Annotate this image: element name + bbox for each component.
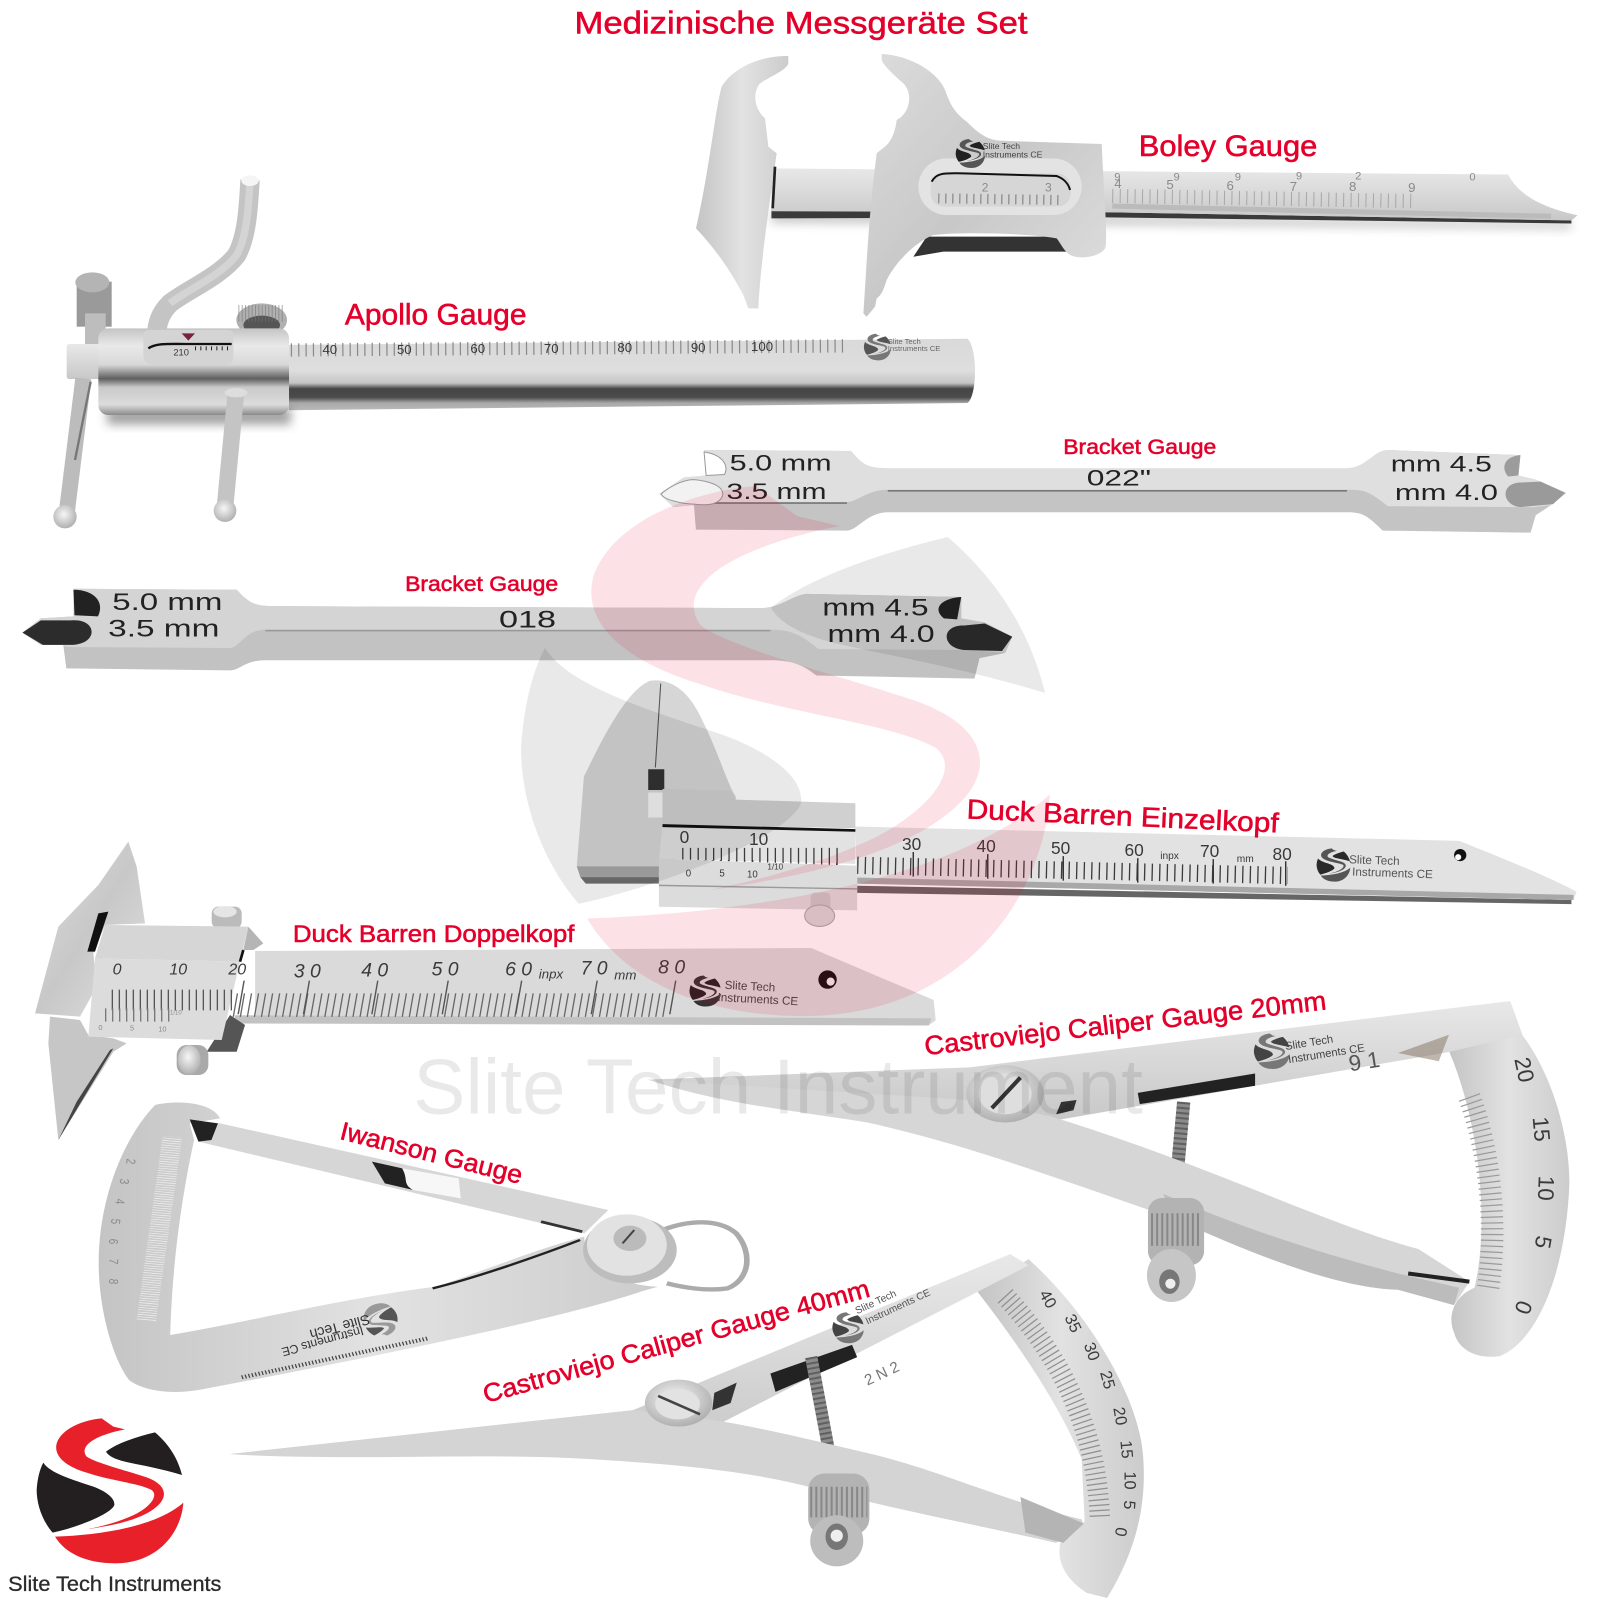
instrument: Apollo gauge: Instruments CE: [888, 344, 940, 353]
instrument: Castroviejo caliper 40mm: 35: [1061, 1311, 1085, 1335]
instrument: Castroviejo caliper 40mm: 0: [1111, 1526, 1130, 1538]
watermark: brand text: Slite Tech Instrument: [413, 1044, 1143, 1130]
label: Bracket Gauge 018: Bracket Gauge: [405, 572, 558, 596]
instrument: Apollo gauge: 100: [751, 339, 773, 354]
instrument: bracket gauge 022: 5.0 mm: [730, 450, 832, 475]
instrument: Boley gauge: 9: [1114, 172, 1121, 184]
instrument: bracket gauge 018: 018: [499, 607, 556, 634]
instrument: bracket gauge 018: [22, 589, 1012, 679]
instrument: Duck Barren Einzelkopf: mm: [1237, 854, 1254, 865]
instrument: Apollo gauge: 40: [322, 342, 337, 357]
label: Castroviejo Caliper Gauge 20mm: Castroviejo Caliper Gauge 20mm: [923, 986, 1328, 1061]
instrument: Duck Barren Einzelkopf: 70: [1200, 841, 1219, 861]
instrument: Boley gauge: 0: [1469, 172, 1476, 184]
instrument: bracket gauge 022: mm 4.0: [1395, 480, 1498, 505]
instrument: Boley gauge: 2: [982, 181, 989, 195]
instrument: Duck Barren Doppelkopf: 7 0: [581, 957, 608, 979]
instrument: Duck Barren Doppelkopf: Slite Tech: [724, 979, 776, 994]
instrument: Duck Barren Doppelkopf: 0: [98, 1023, 102, 1032]
instrument: Castroviejo caliper 20mm: Slite Tech: [1284, 1034, 1334, 1053]
title: Medizinische Messgeräte Set: [574, 5, 1028, 41]
instrument: Duck Barren Einzelkopf: 1/10: [767, 862, 784, 871]
instrument: bracket gauge 022: [659, 450, 1566, 533]
instrument: Duck Barren Doppelkopf: Instruments CE: [717, 991, 799, 1008]
instrument: Duck Barren Doppelkopf: 6 0: [505, 959, 532, 981]
instrument: bracket gauge 018: 5.0 mm: [112, 589, 222, 616]
instrument: Iwanson gauge: 3: [116, 1178, 132, 1185]
instrument: Iwanson gauge: 5: [108, 1218, 123, 1225]
instrument: Boley gauge: 8: [1349, 179, 1356, 194]
instrument: Castroviejo caliper 40mm: 25: [1096, 1369, 1118, 1391]
instrument: Duck Barren Doppelkopf: 3 0: [294, 961, 321, 983]
instrument: bracket gauge 018: mm 4.0: [828, 621, 935, 648]
instrument: Apollo gauge: Slite Tech: [888, 337, 921, 346]
instrument: Boley gauge: [696, 54, 1578, 317]
instrument: Duck Barren Einzelkopf: 10: [749, 829, 768, 849]
instrument: Iwanson gauge: 4: [112, 1198, 127, 1205]
instrument: Boley gauge: 9: [1235, 172, 1241, 184]
instrument: Castroviejo caliper 40mm: 30: [1080, 1340, 1103, 1363]
instrument: Duck Barren Einzelkopf: 50: [1051, 838, 1070, 858]
instrument: Castroviejo caliper 40mm: 2 N 2: [862, 1358, 902, 1389]
instrument: Duck Barren Doppelkopf: 10: [158, 1025, 167, 1034]
instrument: Duck Barren Einzelkopf: 10: [747, 870, 758, 881]
instrument: Castroviejo caliper 40mm: 20: [1109, 1406, 1130, 1427]
instrument: Duck Barren Doppelkopf: 5: [130, 1024, 134, 1033]
instrument: Castroviejo caliper 20mm: 0: [1509, 1297, 1537, 1318]
instrument: Apollo gauge: 210: [173, 347, 189, 357]
instrument: bracket gauge 018: 3.5 mm: [108, 616, 219, 643]
instrument: Duck Barren Einzelkopf: 20: [828, 831, 847, 851]
instrument: Castroviejo caliper 40mm: Slite Tech: [854, 1288, 898, 1317]
logo: Slite Tech Instruments: [37, 1418, 183, 1563]
instrument: Duck Barren Einzelkopf: 5: [719, 869, 725, 880]
instrument: Castroviejo caliper 20mm: [648, 1001, 1569, 1357]
instrument: Duck Barren Einzelkopf: 60: [1124, 840, 1144, 860]
label: Castroviejo Caliper Gauge 40mm: Castroviejo Caliper Gauge 40mm: [480, 1275, 873, 1409]
instrument: Apollo gauge: 60: [470, 341, 485, 356]
instrument: Castroviejo caliper 20mm: 15: [1528, 1116, 1555, 1143]
instrument: Iwanson gauge: 6: [105, 1238, 121, 1245]
instrument: Boley gauge: 2: [1355, 171, 1361, 183]
instrument: Iwanson gauge: 7: [105, 1258, 121, 1265]
instrument: Duck Barren Doppelkopf: 5 0: [432, 959, 459, 981]
instrument: Castroviejo caliper 40mm: [230, 1254, 1144, 1598]
instrument: Castroviejo caliper 40mm: Instruments CE: [864, 1287, 932, 1327]
instrument: Duck Barren Doppelkopf: mm: [614, 968, 636, 983]
instrument: Duck Barren Doppelkopf: 4 0: [361, 960, 388, 982]
label: Apollo Gauge: Apollo Gauge: [345, 298, 527, 331]
instrument: Apollo gauge: 50: [397, 342, 412, 357]
instrument: Duck Barren Einzelkopf: 40: [977, 836, 996, 856]
instrument: Duck Barren Einzelkopf: 0: [686, 869, 692, 880]
instrument: bracket gauge 018: mm 4.5: [822, 594, 929, 621]
instrument: Duck Barren Einzelkopf: [577, 680, 1577, 926]
instrument: Boley gauge: Slite Tech: [983, 141, 1020, 151]
instrument: Boley gauge: 5: [1166, 177, 1174, 192]
instrument: Duck Barren Einzelkopf: Slite Tech: [1349, 853, 1400, 868]
instrument: Boley gauge: 6: [1227, 178, 1234, 193]
instrument: Duck Barren Doppelkopf: 1/10: [170, 1010, 182, 1016]
instrument: Castroviejo caliper 40mm: 5: [1120, 1500, 1138, 1510]
label: Boley Gauge: Boley Gauge: [1139, 130, 1317, 163]
label: Duck Barren Einzelkopf: Duck Barren Einzelkopf: [966, 793, 1280, 839]
instrument: Castroviejo caliper 40mm: 40: [1035, 1287, 1060, 1312]
instrument: Duck Barren Doppelkopf: inpx: [539, 967, 564, 982]
instrument: Castroviejo caliper 20mm: 5: [1530, 1234, 1556, 1250]
instrument: Apollo gauge: 80: [617, 340, 632, 355]
instrument: Duck Barren Doppelkopf: 20: [227, 962, 246, 979]
instrument: Castroviejo caliper 20mm: 10: [1533, 1175, 1559, 1201]
instrument: Apollo gauge: 90: [691, 340, 706, 355]
instrument: Castroviejo caliper 20mm: 9 1: [1347, 1047, 1382, 1076]
instrument: Duck Barren Doppelkopf: 0: [113, 962, 122, 979]
instrument: Iwanson gauge: [99, 1103, 747, 1392]
instrument: Iwanson gauge: 2: [123, 1158, 138, 1165]
instrument: Iwanson gauge: 8: [105, 1278, 121, 1285]
watermark: translucent brand logo: [521, 486, 1050, 1016]
label: Bracket Gauge 022: Bracket Gauge: [1063, 435, 1216, 459]
instrument: Castroviejo caliper 40mm: 10: [1120, 1471, 1138, 1490]
instrument: Apollo gauge: 70: [544, 341, 559, 356]
instrument: Castroviejo caliper 40mm: 15: [1116, 1440, 1136, 1459]
logo wordmark: Slite Tech Instruments: [8, 1572, 221, 1596]
instrument: Iwanson gauge: Slite Tech: [308, 1310, 371, 1342]
instrument: Duck Barren Doppelkopf: [35, 842, 936, 1140]
instrument: Apollo gauge: [53, 175, 975, 528]
label: Iwanson Gauge: Iwanson Gauge: [337, 1117, 525, 1190]
instrument: Duck Barren Doppelkopf: 10: [169, 962, 187, 979]
instrument: Duck Barren Doppelkopf: 8 0: [658, 956, 685, 978]
instrument: bracket gauge 022: mm 4.5: [1391, 451, 1492, 476]
instrument: Boley gauge: 4: [1114, 176, 1122, 191]
instrument: Duck Barren Einzelkopf: Instruments CE: [1352, 866, 1433, 881]
instrument: Duck Barren Einzelkopf: inpx: [1160, 851, 1179, 862]
instrument: bracket gauge 022: 3.5 mm: [727, 479, 827, 504]
instrument: Castroviejo caliper 20mm: 20: [1509, 1055, 1539, 1085]
instrument: Boley gauge: 9: [1173, 172, 1180, 184]
instrument: Duck Barren Einzelkopf: 30: [902, 834, 921, 854]
instrument: Boley gauge: 7: [1290, 179, 1297, 194]
instrument: Boley gauge: 9: [1408, 180, 1416, 195]
instrument: Boley gauge: 3: [1045, 181, 1052, 195]
instrument: Boley gauge: 9: [1296, 171, 1302, 183]
instrument: Boley gauge: Instruments CE: [983, 149, 1043, 159]
instrument: Iwanson gauge: Instruments CE: [280, 1324, 365, 1359]
instrument: Castroviejo caliper 20mm: Instruments CE: [1287, 1042, 1366, 1066]
label: Duck Barren Doppelkopf: Duck Barren Doppelkopf: [293, 921, 575, 948]
instrument: Duck Barren Einzelkopf: 80: [1272, 844, 1292, 864]
instrument: bracket gauge 022: 022": [1087, 466, 1151, 491]
instrument: Duck Barren Einzelkopf: 0: [680, 827, 689, 847]
